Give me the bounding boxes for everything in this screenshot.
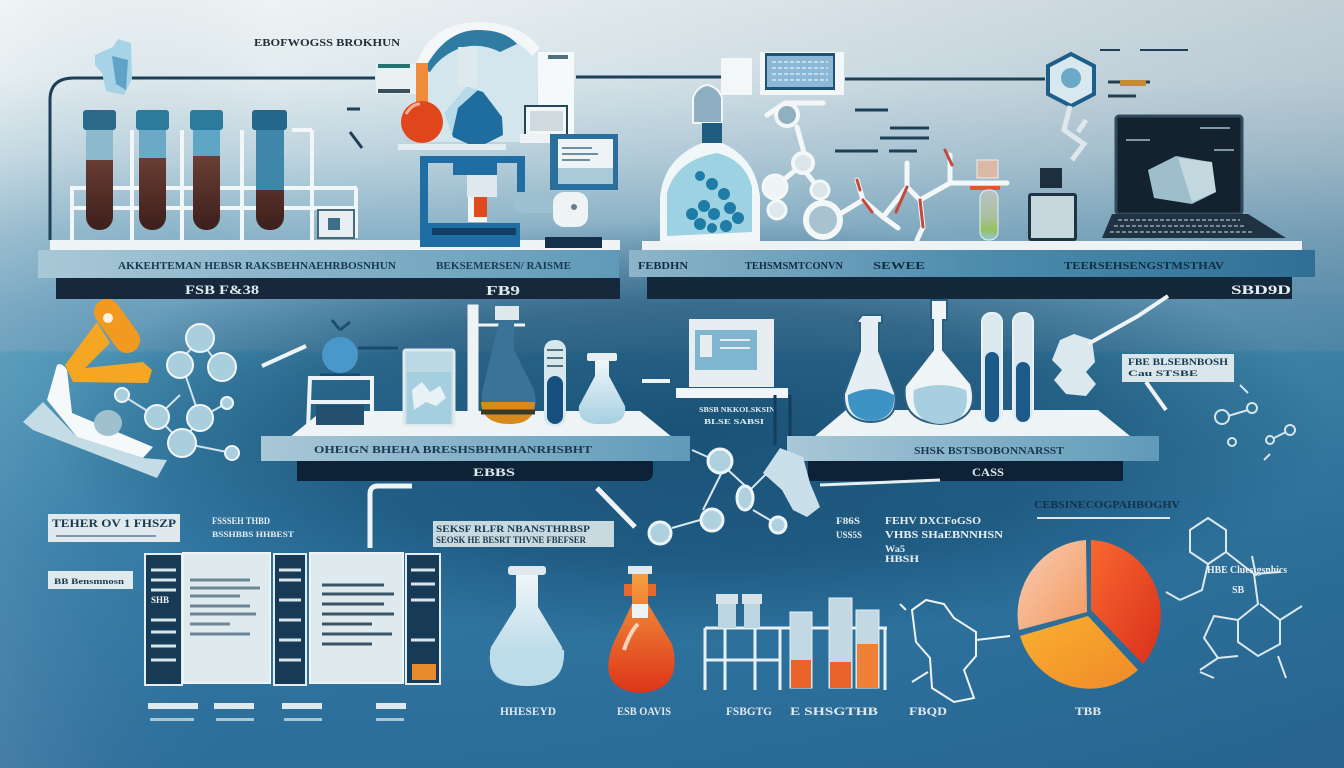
panel: top shelf right: SBD9D bbox=[1231, 282, 1291, 297]
bottom labels: HHESEYD bbox=[500, 704, 556, 718]
panel: top shelf left: FSB F&38 bbox=[185, 282, 260, 297]
panel: top shelf right: TEERSEHSENGSTMSTHAV bbox=[1064, 260, 1224, 272]
bottom labels: FSBGTG bbox=[726, 704, 772, 718]
icon: bench apparatus bbox=[262, 320, 398, 428]
panel: top shelf left bbox=[38, 240, 620, 299]
text block: central notes: HBSH bbox=[885, 554, 919, 564]
tall test tube middle bbox=[544, 340, 566, 426]
dome and pale housing bbox=[430, 28, 537, 142]
small monitor bbox=[520, 106, 567, 143]
top connector line bbox=[50, 50, 1188, 240]
white round instrument bbox=[553, 192, 588, 227]
icon: top monitor bbox=[721, 52, 844, 95]
blue flask bbox=[398, 47, 506, 150]
callout: centre label: SEKSF RLFR NBANSTHRBSP bbox=[436, 524, 591, 534]
panel: top shelf right: FEBDHN bbox=[638, 261, 689, 272]
big monitor bbox=[550, 134, 618, 190]
callout: centre label bbox=[433, 521, 614, 547]
label: lower left boxes: BB Bensmnosn bbox=[54, 577, 125, 586]
icon: small monitor middle bbox=[642, 319, 790, 445]
small square box bbox=[318, 210, 354, 238]
molecule right of bench bbox=[1052, 296, 1168, 410]
panel: report documents: SHB bbox=[151, 595, 169, 605]
panel: report documents bbox=[145, 553, 440, 721]
molecule lower middle bbox=[900, 600, 1010, 702]
text block: central notes: VHBS SHaEBNNHSN bbox=[885, 530, 1004, 541]
bottom labels: ESB OAVIS bbox=[617, 704, 671, 718]
bottom labels: FBQD bbox=[909, 704, 947, 718]
small clear flask bbox=[579, 353, 625, 424]
panel: top shelf right: SEWEE bbox=[873, 261, 925, 272]
pie chart heading: CEBSINECOGPAHBOGHV bbox=[1034, 499, 1180, 511]
beaker of crystals bbox=[404, 350, 454, 425]
icon: rack of test tubes bottom bbox=[705, 594, 887, 690]
panel: middle left lab bench: EBBS bbox=[473, 465, 515, 479]
panel: middle left lab bench bbox=[261, 411, 690, 481]
small molecule doodles right bbox=[1215, 385, 1295, 460]
molecule network right: HBE Cluestgsnhics bbox=[1207, 565, 1287, 576]
label: lower left boxes: TEHER OV 1 FHSZP bbox=[52, 516, 176, 530]
flask with orange liquid bbox=[469, 306, 536, 424]
panel: middle right lab bench bbox=[787, 410, 1159, 481]
connector bracket lower left bbox=[370, 486, 412, 548]
icon: hexagon top right bbox=[1048, 54, 1150, 160]
test tube and bottle on shelf bbox=[970, 160, 1077, 241]
flasks on right bench bbox=[844, 300, 1033, 424]
label: lower left boxes: BSSHBBS HHBEST bbox=[212, 530, 295, 539]
molecule centre bbox=[597, 448, 940, 544]
text block: central notes: USS5S bbox=[836, 530, 862, 540]
test tubes bbox=[83, 110, 287, 230]
molecule network right: SB bbox=[1232, 585, 1245, 596]
microscope body bbox=[420, 156, 602, 248]
icon: orange flask bbox=[608, 566, 675, 693]
molecule left bbox=[115, 324, 239, 460]
callout: right label: Cau STSBE bbox=[1128, 369, 1198, 378]
top heading: EBOFWOGSS BROKHUN bbox=[254, 38, 401, 49]
left side box bbox=[376, 64, 416, 94]
rack frame bbox=[71, 130, 357, 240]
icon: laptop bbox=[1102, 116, 1286, 238]
callout: right label: FBE BLSEBNBOSH bbox=[1128, 357, 1228, 367]
panel: test tube rack bbox=[71, 110, 357, 240]
pie chart bbox=[1017, 540, 1161, 689]
icon: small monitor middle: SBSB NKKOLSKSIN bbox=[699, 406, 775, 414]
bottom labels bbox=[500, 704, 1101, 718]
panel: middle left lab bench: OHEIGN BHEHA BRESHSBHMHANRHSBHT bbox=[314, 445, 592, 456]
icon: small monitor middle: BLSE SABSI bbox=[704, 418, 764, 426]
panel: top shelf right: TEHSMSMTCONVN bbox=[745, 260, 843, 272]
molecule chain top centre bbox=[763, 103, 1007, 240]
text block: central notes bbox=[836, 516, 1004, 564]
bottom labels: E SHSGTHB bbox=[790, 704, 878, 718]
panel: microscope and flasks bbox=[376, 22, 618, 248]
icon: orange microscope left bbox=[23, 312, 167, 478]
panel: top shelf left: AKKEHTEMAN HEBSR RAKSBEHNAEHRBOSNHUN bbox=[118, 260, 396, 272]
panel: top shelf right bbox=[629, 241, 1315, 299]
panel: top shelf left: BEKSEMERSEN/ RAISME bbox=[436, 260, 571, 272]
text block: central notes: Wa5 bbox=[885, 544, 906, 554]
bottom labels: TBB bbox=[1075, 704, 1101, 718]
label: lower left boxes: FSSSEH THBD bbox=[212, 516, 270, 526]
callout: centre label: SEOSK HE BESRT THVNE FBEFSER bbox=[436, 535, 586, 545]
panel: middle right lab bench: CASS bbox=[972, 465, 1004, 479]
icon: clear flask bbox=[490, 566, 564, 686]
molecule network right bbox=[1166, 518, 1302, 678]
panel: top shelf left: FB9 bbox=[486, 284, 520, 299]
panel: crystal bell jar bbox=[660, 85, 760, 241]
red flask bbox=[401, 63, 443, 143]
callout: right label bbox=[1122, 354, 1234, 382]
text block: central notes: FEHV DXCFoGSO bbox=[885, 516, 981, 527]
text block: central notes: F86S bbox=[836, 516, 860, 526]
panel: middle right lab bench: SHSK BSTSBOBONNARSST bbox=[914, 446, 1064, 457]
icon: small crystal top left bbox=[95, 39, 132, 95]
label: lower left boxes bbox=[48, 514, 295, 589]
